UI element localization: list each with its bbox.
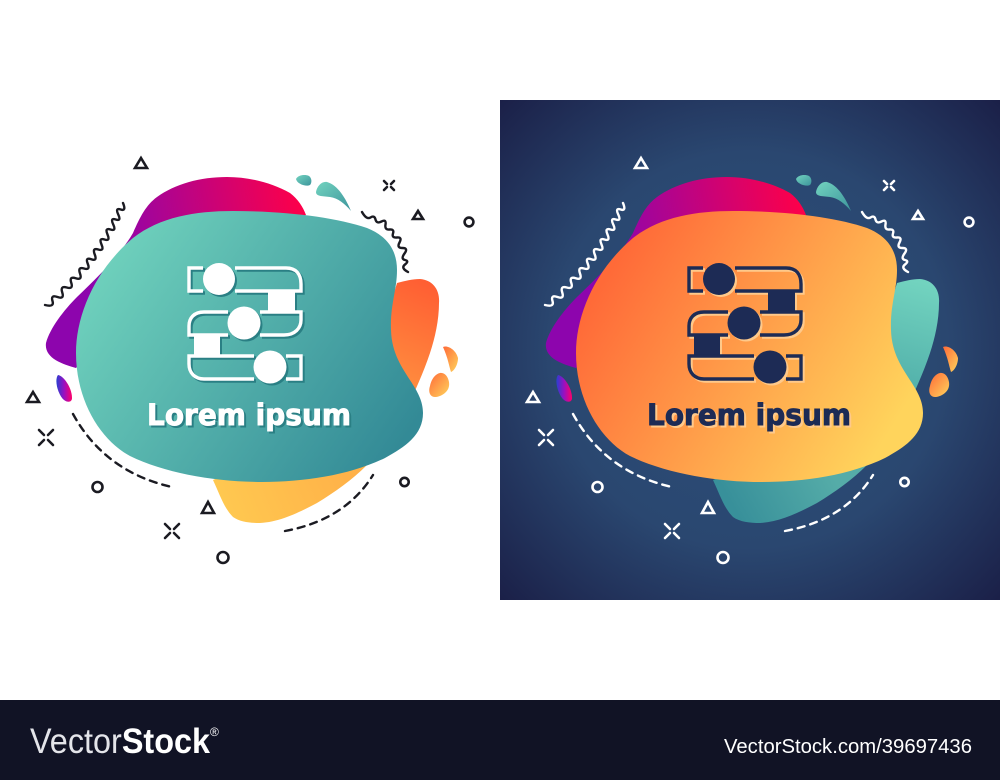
circles bbox=[92, 218, 473, 563]
text: lorem ipsum: Lorem ipsum bbox=[147, 398, 351, 432]
decorations: white outlines bbox=[527, 158, 973, 563]
drop: large teal bbox=[816, 182, 851, 211]
text shadow: lorem ipsum: Lorem ipsum bbox=[149, 400, 353, 434]
panel: dark version bbox=[527, 158, 973, 563]
logo: registered mark: ® bbox=[210, 725, 219, 739]
panel: dark background bbox=[500, 100, 1000, 600]
icon: sliders bbox=[689, 263, 801, 384]
blob: main orange bbox=[576, 211, 923, 482]
circles bbox=[592, 218, 973, 563]
dashed arc: lower left bbox=[573, 414, 672, 487]
blob: purple to red bbox=[46, 177, 306, 368]
text: image id: VectorStock.com/39697436 bbox=[724, 736, 972, 758]
dashed arc: lower right bbox=[785, 475, 873, 531]
blob: teal bottom bbox=[713, 450, 867, 523]
squiggle: left bbox=[545, 203, 624, 306]
text: lorem ipsum: Lorem ipsum bbox=[647, 398, 851, 432]
icon: sliders, highlight bbox=[691, 265, 803, 386]
squiggle: right bbox=[362, 212, 408, 272]
crosses bbox=[39, 181, 394, 538]
blob: purple to red bbox=[546, 177, 806, 368]
leaf: blue to magenta bbox=[556, 375, 572, 402]
panel: light version bbox=[27, 158, 473, 563]
blob: teal right bbox=[880, 279, 939, 395]
icon: sliders bbox=[189, 263, 301, 384]
triangles bbox=[527, 158, 923, 513]
triangles bbox=[27, 158, 423, 513]
squiggle: left bbox=[45, 203, 124, 306]
squiggle: right bbox=[862, 212, 908, 272]
drop: large teal bbox=[316, 182, 351, 211]
dashed arc: lower left bbox=[73, 414, 172, 487]
drop: small teal bbox=[796, 175, 811, 186]
blob: orange bbox=[380, 279, 439, 395]
icon: sliders, shadow bbox=[191, 265, 303, 386]
logo: VectorStock: VectorStock bbox=[30, 722, 210, 761]
drop: orange lower bbox=[929, 373, 949, 397]
dashed arc: lower right bbox=[285, 475, 373, 531]
leaf: blue to magenta bbox=[56, 375, 72, 402]
drop: small teal bbox=[296, 175, 311, 186]
drop: orange upper bbox=[443, 347, 458, 372]
footer bar bbox=[0, 700, 1000, 780]
blob: yellow bbox=[213, 450, 367, 523]
decorations: dark outlines bbox=[27, 158, 473, 563]
text shadow: lorem ipsum: Lorem ipsum bbox=[649, 400, 853, 434]
crosses bbox=[539, 181, 894, 538]
drop: orange upper bbox=[943, 347, 958, 372]
blob: main teal bbox=[76, 211, 423, 482]
drop: orange lower bbox=[429, 373, 449, 397]
